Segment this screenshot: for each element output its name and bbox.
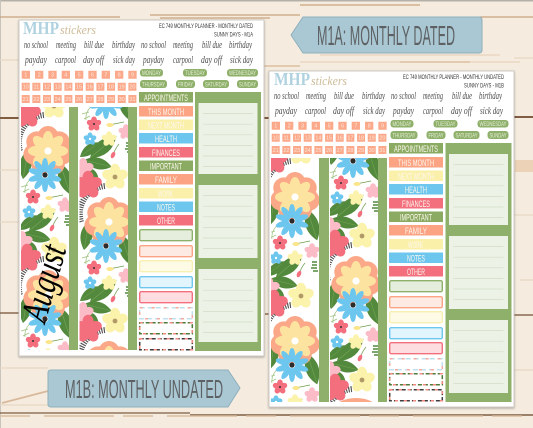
category label bars: THIS MONTH bbox=[398, 158, 434, 169]
script word stickers: payday bbox=[24, 55, 47, 66]
date number grid: 22 bbox=[283, 148, 289, 154]
date number grid: 20 bbox=[129, 85, 135, 91]
category label bars: NOTES bbox=[407, 254, 425, 264]
logo: MHP bbox=[274, 69, 310, 89]
script word stickers: day off bbox=[83, 55, 106, 66]
date number grid: 23 bbox=[44, 97, 50, 103]
date number grid: 23 bbox=[294, 148, 300, 154]
script word stickers: meeting bbox=[423, 91, 443, 102]
date number grid: 29 bbox=[108, 97, 114, 103]
weekday pills: MONDAY bbox=[392, 121, 412, 128]
date number grid: 19 bbox=[369, 136, 375, 142]
script word stickers: day off bbox=[451, 106, 474, 117]
sticker sheet: monthly undated (right) bbox=[267, 70, 516, 410]
date number grid: 12 bbox=[44, 85, 50, 91]
date number grid: 6 bbox=[341, 124, 344, 130]
date number grid bbox=[272, 124, 387, 154]
script word stickers: payday bbox=[392, 106, 414, 117]
date number grid: 3 bbox=[51, 73, 54, 79]
script word stickers: bill due bbox=[334, 91, 354, 102]
date number grid: 8 bbox=[118, 73, 121, 79]
weekday pills: SATURDAY bbox=[456, 132, 478, 139]
logo bbox=[274, 69, 347, 89]
script word stickers: bill due bbox=[84, 40, 104, 51]
script word stickers: meeting bbox=[173, 40, 193, 51]
script word stickers: carpool bbox=[173, 55, 193, 66]
weekday pills: SATURDAY bbox=[205, 81, 227, 88]
date number grid: 4 bbox=[314, 124, 317, 130]
weekday pills: SUNDAY bbox=[490, 132, 507, 139]
script word stickers: sick day bbox=[363, 106, 385, 117]
script word stickers: bill due bbox=[452, 91, 472, 102]
date number grid: 10 bbox=[23, 85, 29, 91]
date number grid: 22 bbox=[33, 97, 39, 103]
date number grid: 30 bbox=[369, 148, 375, 154]
date number grid: 27 bbox=[337, 148, 343, 154]
date number grid: 16 bbox=[337, 136, 343, 142]
script word stickers: meeting bbox=[56, 40, 76, 51]
date number grid: 26 bbox=[76, 97, 82, 103]
category label bars: NEXT MONTH bbox=[398, 172, 434, 182]
date number grid: 19 bbox=[119, 85, 125, 91]
category label bars bbox=[389, 143, 443, 278]
date number grid: 15 bbox=[76, 85, 82, 91]
category label bars: FAMILY bbox=[405, 226, 427, 237]
ribbon label: M1B monthly undated: M1B: MONTHLY UNDATED bbox=[65, 374, 223, 404]
script word stickers bbox=[24, 40, 253, 66]
date number grid: 27 bbox=[87, 97, 93, 103]
date number grid: 5 bbox=[78, 73, 81, 79]
date number grid: 11 bbox=[34, 85, 39, 91]
weekday pills: WEDNESDAY bbox=[229, 70, 256, 77]
weekday pills bbox=[390, 120, 508, 139]
floral border boxes bbox=[140, 308, 192, 350]
date number grid: 31 bbox=[129, 97, 135, 103]
script word stickers: meeting bbox=[306, 91, 326, 102]
date number grid: 17 bbox=[97, 85, 103, 91]
category label bars: FINANCES bbox=[402, 199, 430, 210]
category label bars: FINANCES bbox=[152, 148, 180, 159]
sheet title: SUNNY DAYS - M1B bbox=[464, 82, 504, 90]
ribbon label: M1B monthly undated bbox=[48, 370, 240, 407]
weekday pills bbox=[140, 69, 258, 88]
script word stickers bbox=[274, 91, 503, 117]
floral strip one bbox=[271, 158, 329, 402]
category label bars: NEXT MONTH bbox=[148, 120, 184, 132]
date number grid: 1 bbox=[24, 73, 27, 79]
date number grid: 6 bbox=[91, 73, 94, 79]
date number grid: 10 bbox=[273, 136, 279, 142]
script word stickers: carpool bbox=[55, 55, 76, 66]
date number grid bbox=[22, 73, 137, 103]
floral strip two bbox=[330, 158, 387, 402]
date number grid: 17 bbox=[347, 136, 353, 142]
sticker sheet: monthly dated (left) bbox=[17, 19, 266, 359]
outlined colour boxes bbox=[140, 230, 192, 303]
green panel with three ruled note boxes bbox=[195, 92, 261, 351]
green panel with three ruled note boxes bbox=[446, 143, 512, 402]
date number grid: 31 bbox=[379, 148, 385, 154]
weekday pills: WEDNESDAY bbox=[480, 121, 507, 128]
script word stickers: sick day bbox=[113, 55, 135, 66]
date number grid: 2 bbox=[38, 73, 41, 79]
date number grid: 14 bbox=[65, 85, 71, 91]
date number grid: 25 bbox=[315, 148, 321, 154]
script word stickers: no school bbox=[391, 91, 416, 102]
date number grid: 14 bbox=[315, 136, 321, 142]
script word stickers: carpool bbox=[423, 106, 443, 117]
script word stickers: carpool bbox=[305, 106, 326, 117]
floral strip two bbox=[80, 107, 137, 350]
weekday pills: MONDAY bbox=[142, 70, 161, 77]
floral strip one with August script: August bbox=[13, 239, 75, 329]
category label bars: HEALTH bbox=[405, 185, 427, 196]
weekday pills: TUESDAY bbox=[436, 121, 456, 128]
date number grid: 21 bbox=[273, 148, 279, 154]
date number grid: 7 bbox=[354, 124, 357, 130]
weekday pills: SUNDAY bbox=[239, 81, 256, 88]
script word stickers: day off bbox=[333, 106, 356, 117]
category label bars: NOTES bbox=[157, 202, 175, 214]
category label bars: OTHER bbox=[407, 267, 425, 278]
date number grid: 18 bbox=[358, 136, 364, 142]
date number grid: 21 bbox=[23, 97, 29, 103]
date number grid: 13 bbox=[55, 85, 61, 91]
script word stickers: no school bbox=[24, 40, 48, 51]
weekday pills: FRIDAY bbox=[178, 81, 193, 88]
date number grid: 13 bbox=[305, 136, 311, 142]
date number grid: 15 bbox=[326, 136, 332, 142]
date number grid: 25 bbox=[65, 97, 71, 103]
date number grid: 24 bbox=[55, 97, 61, 103]
category label bars: WORK bbox=[408, 240, 423, 251]
floral strip one with August script bbox=[21, 107, 78, 350]
weekday pills: THURSDAY bbox=[392, 132, 416, 139]
date number grid: 4 bbox=[64, 73, 67, 79]
script word stickers: birthday bbox=[362, 91, 385, 102]
floral border boxes bbox=[390, 359, 442, 401]
script word stickers: birthday bbox=[112, 40, 135, 51]
logo: stickers bbox=[60, 22, 96, 37]
outlined colour boxes bbox=[390, 281, 442, 354]
category label bars: WORK bbox=[158, 189, 173, 200]
script word stickers: sick day bbox=[230, 55, 253, 66]
date number grid: 16 bbox=[87, 85, 93, 91]
script word stickers: no school bbox=[274, 91, 299, 102]
date number grid: 28 bbox=[97, 97, 103, 103]
date number grid: 9 bbox=[381, 124, 384, 130]
date number grid: 3 bbox=[301, 124, 304, 130]
script word stickers: payday bbox=[274, 106, 297, 117]
category label bars bbox=[139, 92, 193, 227]
category label bars: THIS MONTH bbox=[148, 107, 184, 118]
script word stickers: sick day bbox=[480, 106, 503, 117]
sheet title bbox=[159, 23, 253, 38]
date number grid: 5 bbox=[328, 124, 331, 130]
date number grid: 26 bbox=[326, 148, 332, 154]
date number grid: 28 bbox=[347, 148, 353, 154]
weekday pills: TUESDAY bbox=[185, 70, 205, 77]
weekday pills: THURSDAY bbox=[142, 81, 165, 88]
date number grid: 24 bbox=[305, 148, 311, 154]
category label bars: HEALTH bbox=[155, 134, 177, 145]
logo: stickers bbox=[311, 73, 347, 88]
category label bars: IMPORTANT bbox=[400, 212, 432, 224]
date number grid: 2 bbox=[288, 124, 291, 130]
script word stickers: no school bbox=[141, 40, 166, 51]
date number grid: 29 bbox=[358, 148, 364, 154]
category label bars: APPOINTMENTS bbox=[394, 144, 438, 155]
weekday pills: FRIDAY bbox=[428, 132, 444, 139]
category label bars: APPOINTMENTS bbox=[144, 93, 188, 104]
date number grid: 18 bbox=[108, 85, 114, 91]
category label bars: FAMILY bbox=[155, 175, 177, 186]
date number grid: 9 bbox=[131, 73, 134, 79]
logo: MHP bbox=[23, 18, 59, 38]
date number grid: 20 bbox=[379, 136, 385, 142]
ribbon label: M1A monthly dated bbox=[291, 17, 482, 53]
category label bars: IMPORTANT bbox=[150, 162, 182, 172]
sheet title bbox=[403, 74, 504, 90]
script word stickers: bill due bbox=[202, 40, 222, 51]
date number grid: 7 bbox=[104, 73, 107, 79]
date number grid: 8 bbox=[368, 124, 371, 130]
script word stickers: payday bbox=[142, 55, 164, 66]
logo bbox=[23, 18, 96, 38]
date number grid: 1 bbox=[274, 124, 277, 130]
script word stickers: birthday bbox=[229, 40, 252, 51]
date number grid: 12 bbox=[294, 136, 300, 142]
sheet title: EC 749 MONTHLY PLANNER - MONTHLY DATED bbox=[159, 23, 253, 30]
script word stickers: day off bbox=[201, 55, 224, 66]
category label bars: OTHER bbox=[157, 216, 175, 227]
date number grid: 30 bbox=[119, 97, 125, 103]
sheet title: SUNNY DAYS - M1A bbox=[214, 32, 253, 38]
date number grid: 11 bbox=[284, 136, 289, 142]
script word stickers: birthday bbox=[479, 91, 502, 102]
